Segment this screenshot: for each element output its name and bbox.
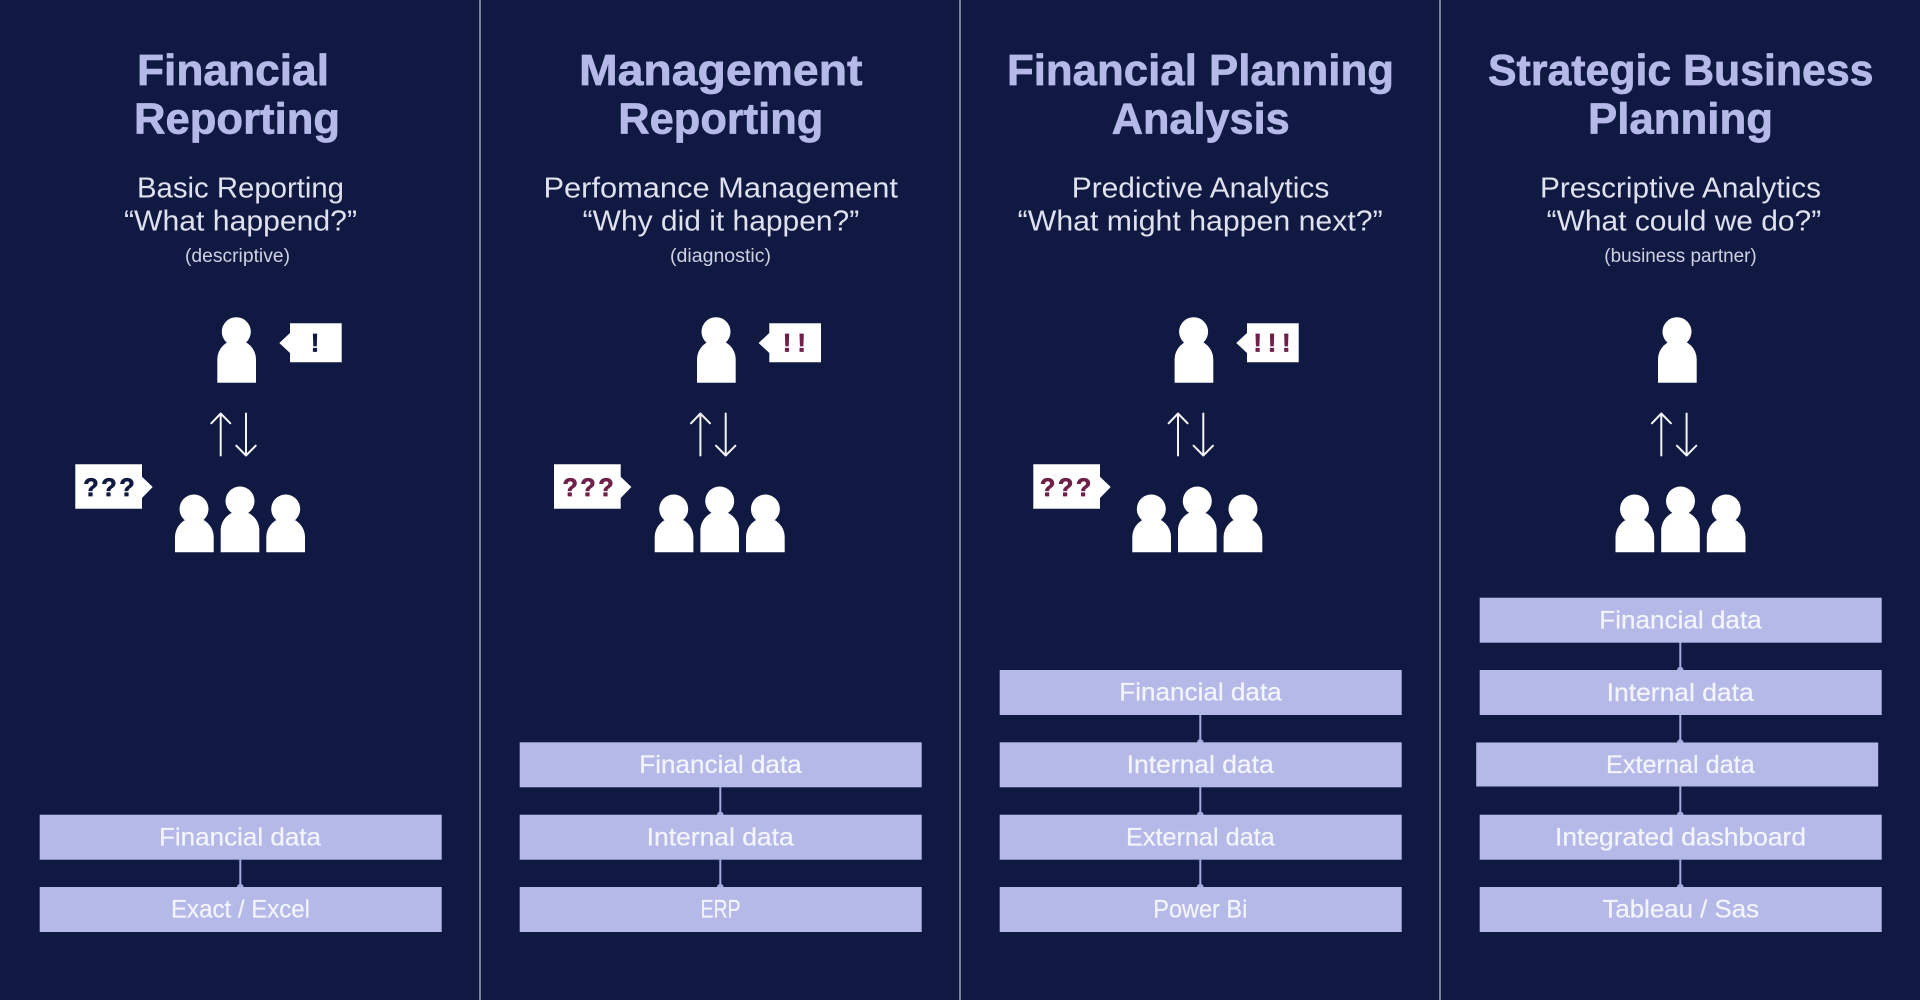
subtitle: predictive analytics: “What might happen next?”: [1018, 205, 1383, 237]
subtitle: performance management: [544, 172, 898, 267]
callout: manager answer: !: [1282, 330, 1290, 358]
box: erp: ERP: [700, 896, 740, 924]
heading: management reporting: Management: [579, 46, 863, 95]
box: erp: [520, 887, 922, 932]
subtitle: performance management: (diagnostic): [670, 246, 771, 267]
heading: financial planning analysis: [1007, 46, 1394, 143]
callout: team questions: [554, 464, 631, 509]
callout: manager answer: !: [1268, 330, 1276, 358]
callout: team questions: ?: [580, 474, 596, 502]
data stack: [1000, 670, 1402, 932]
box: external data: [1000, 815, 1402, 860]
callout: manager answer: !: [311, 330, 319, 358]
heading: financial planning analysis: Analysis: [1112, 94, 1290, 143]
panel: financial reporting: [40, 46, 442, 932]
heading: financial reporting: [134, 46, 340, 143]
callout: team questions: ?: [598, 474, 614, 502]
icon: two-way arrows: [211, 414, 256, 456]
box: internal data: [1480, 670, 1882, 715]
box: internal data: Internal data: [1127, 751, 1274, 779]
box: exact / excel: [40, 887, 442, 932]
box: financial data: Financial data: [159, 823, 321, 851]
box: power bi: Power Bi: [1153, 896, 1247, 924]
box: internal data: Internal data: [1607, 679, 1754, 707]
box: external data: External data: [1126, 823, 1275, 851]
box: external data: [1476, 742, 1878, 786]
heading: management reporting: [579, 46, 863, 143]
heading: strategic business planning: Planning: [1588, 94, 1773, 143]
box: tableau / sas: [1480, 887, 1882, 932]
subtitle: performance management: “Why did it happen?”: [583, 205, 859, 237]
subtitle: prescriptive analytics: “What could we do?”: [1547, 205, 1821, 237]
callout: manager answer: [759, 323, 821, 362]
callout: team questions: ?: [1076, 474, 1091, 502]
panel: management reporting: [520, 46, 922, 932]
callout: team questions: [75, 464, 153, 509]
callout: team questions: [1033, 464, 1111, 509]
subtitle: basic reporting: (descriptive): [185, 246, 290, 267]
box: financial data: [1480, 598, 1882, 643]
subtitle: basic reporting: “What happend?”: [124, 205, 357, 237]
icon: manager: [697, 317, 736, 383]
heading: financial reporting: Reporting: [134, 94, 340, 143]
icon: team: [1616, 486, 1746, 552]
callout: team questions: ?: [101, 474, 117, 502]
icon: team: [175, 486, 305, 552]
box: financial data: Financial data: [1119, 678, 1282, 706]
box: financial data: [520, 742, 922, 787]
box: power bi: [1000, 887, 1402, 932]
icon: team: [1132, 486, 1262, 552]
box: exact / excel: Exact / Excel: [171, 896, 310, 924]
data stack: [520, 742, 922, 932]
box: internal data: Internal data: [647, 823, 794, 851]
icon: two-way arrows: [1652, 414, 1696, 456]
callout: manager answer: [279, 323, 342, 362]
callout: team questions: ?: [1058, 474, 1073, 502]
subtitle: basic reporting: Basic Reporting: [137, 172, 344, 204]
box: financial data: [40, 815, 442, 860]
box: external data: External data: [1606, 751, 1755, 779]
box: internal data: [1000, 742, 1402, 787]
heading: financial planning analysis: Financial Planning: [1007, 46, 1394, 95]
data stack: [1476, 598, 1882, 932]
box: integrated dashboard: [1480, 815, 1882, 860]
callout: manager answer: !: [798, 330, 806, 358]
icon: two-way arrows: [1169, 414, 1213, 456]
panel: financial planning analysis: [1000, 46, 1402, 932]
heading: management reporting: Reporting: [618, 94, 823, 143]
callout: team questions: ?: [1040, 474, 1055, 502]
subtitle: basic reporting: [124, 172, 357, 267]
callout: team questions: ?: [83, 474, 99, 502]
callout: team questions: ?: [563, 474, 578, 502]
box: internal data: [520, 815, 922, 860]
callout: manager answer: !: [1254, 330, 1262, 358]
box: financial data: Financial data: [639, 751, 802, 779]
subtitle: predictive analytics: Predictive Analytics: [1072, 172, 1329, 204]
callout: manager answer: !: [783, 330, 791, 358]
icon: two-way arrows: [691, 414, 735, 456]
icon: manager: [1658, 317, 1697, 383]
data stack: [40, 815, 442, 932]
box: financial data: Financial data: [1599, 606, 1762, 634]
subtitle: performance management: Perfomance Management: [544, 172, 898, 204]
subtitle: prescriptive analytics: [1540, 172, 1821, 267]
icon: manager: [217, 317, 256, 383]
heading: financial reporting: Financial: [137, 46, 329, 95]
icon: manager: [1175, 317, 1213, 383]
panel: strategic business planning: [1476, 46, 1882, 932]
box: financial data: [1000, 670, 1402, 715]
callout: manager answer: [1236, 323, 1299, 362]
heading: strategic business planning: Strategic Business: [1488, 46, 1874, 95]
callout: team questions: ?: [119, 474, 135, 502]
box: tableau / sas: Tableau / Sas: [1602, 896, 1759, 924]
subtitle: predictive analytics: [1018, 172, 1383, 237]
subtitle: prescriptive analytics: (business partner): [1604, 246, 1757, 267]
heading: strategic business planning: [1488, 46, 1874, 143]
box: integrated dashboard: Integrated dashboard: [1555, 823, 1806, 851]
subtitle: prescriptive analytics: Prescriptive Analytics: [1540, 172, 1821, 204]
icon: team: [655, 486, 785, 552]
